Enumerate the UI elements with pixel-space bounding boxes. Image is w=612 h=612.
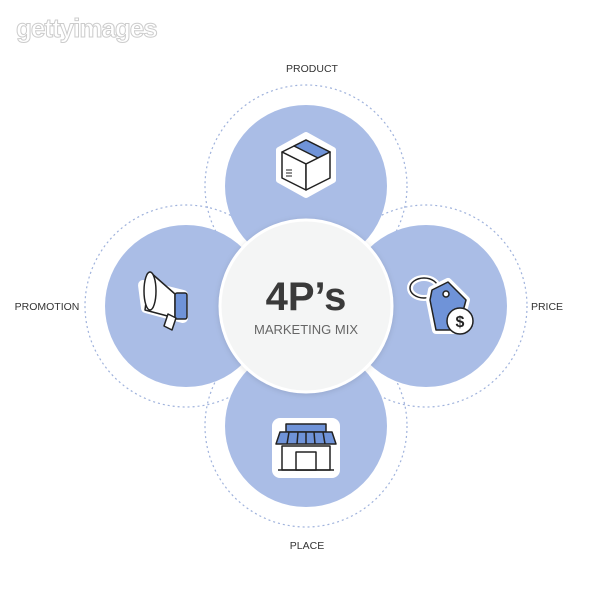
icon: price tag: $: [456, 314, 465, 331]
label: place: PLACE: [290, 540, 324, 552]
label: promotion: PROMOTION: [15, 301, 79, 313]
icon: box: [279, 135, 333, 195]
center circle: [220, 220, 392, 392]
circle: promotion: [105, 225, 267, 387]
circle: price: [345, 225, 507, 387]
watermark: gettyimages: [16, 13, 157, 43]
center title: 4P’s: [266, 275, 346, 319]
center subtitle: MARKETING MIX: [254, 322, 358, 337]
circle: product: [225, 105, 387, 267]
icon: megaphone: [143, 272, 187, 330]
dashed rings: [85, 85, 527, 527]
icon: price tag: [410, 278, 473, 334]
circle: place: [225, 345, 387, 507]
label: price: PRICE: [531, 301, 563, 313]
label: product: PRODUCT: [286, 63, 339, 75]
icon: store: [274, 420, 338, 476]
